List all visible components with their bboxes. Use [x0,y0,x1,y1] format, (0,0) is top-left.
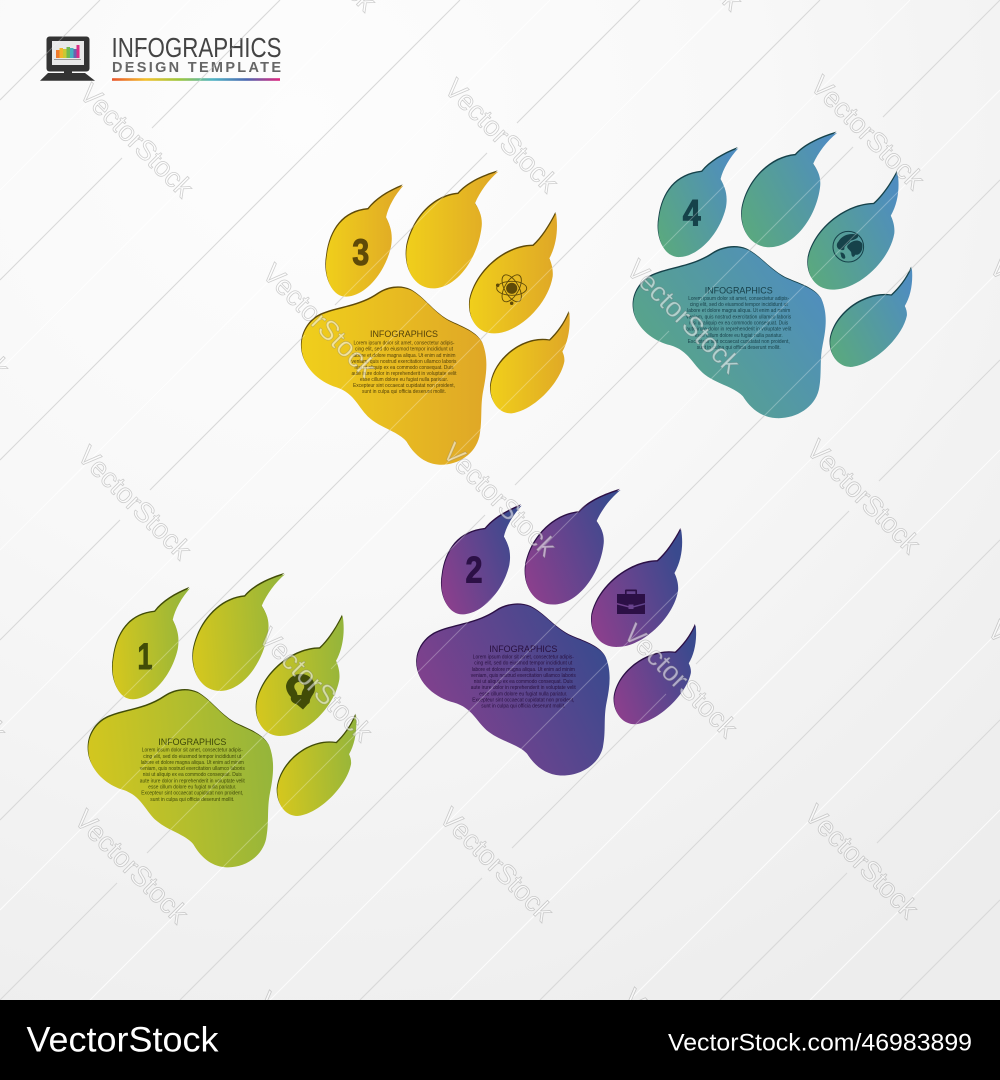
text block yellow: Excepteur sint occaecat cupidatat non proident, [353,383,455,389]
text block teal [686,285,792,351]
text block yellow: Lorem ipsum dolor sit amet, consectetur adipis- [354,341,455,347]
logo header [40,32,282,81]
watermark pattern: VectorStock [257,258,383,383]
text block yellow: veniam, quis nostrud exercitation ullamco laboris [352,359,457,365]
watermark pattern: VectorStock [434,802,560,927]
text block teal: Lorem ipsum dolor sit amet, consectetur adipis- [688,296,789,302]
text block purple: INFOGRAPHICS [489,644,557,655]
watermark pattern: VectorStock [69,804,195,929]
watermark pattern: VectorStock [72,440,198,565]
panel: paw 1 green [88,573,356,867]
watermark pattern: VectorStock [437,437,563,562]
icon: computer monitor with bar chart [40,36,95,81]
text block green: INFOGRAPHICS [158,737,226,748]
heading: infographics: INFOGRAPHICS [112,32,282,63]
watermark pattern: VectorStock [621,254,747,379]
icon: head with light bulb [286,674,315,710]
text block teal: sunt in culpa qui officia deserunt mollit. [697,345,781,351]
text block green: esse cillum dolore eu fugiat nulla pariatur. [148,785,236,791]
panel: paw 3 yellow [301,170,570,465]
text block teal: esse cillum dolore eu fugiat nulla pariatur. [695,333,783,339]
text block teal: veniam, quis nostrud exercitation ullamco laboris [686,314,792,320]
text block green: nisi ut aliquip ex ea commodo consequat. Duis [143,772,242,778]
text block yellow: INFOGRAPHICS [370,329,438,340]
text block green: Excepteur sint occaecat cupidatat non proident, [141,791,243,797]
icon: globe [833,231,864,262]
text block green: aute irure dolor in reprehenderit in voluptate velit [140,778,245,784]
text block purple: aute irure dolor in reprehenderit in voluptate velit [471,685,576,691]
text block teal: cing elit, sed do eiusmod tempor incididunt ut [690,302,788,308]
icon: atom [496,272,527,305]
text block yellow [352,329,457,395]
footer logo text: VectorStock [26,1021,219,1060]
text block green: veniam, quis nostrud exercitation ullamco laboris [140,766,245,772]
panel: paw 2 purple [415,487,697,778]
text block teal: labore et dolore magna aliqua. Ut enim ad minim [687,308,790,314]
text block purple: esse cillum dolore eu fugiat nulla pariatur. [479,691,567,697]
footer band [0,1000,1000,1080]
subheading: design template: DESIGN TEMPLATE [112,60,281,76]
watermark pattern: VectorStock [439,73,565,198]
text block yellow: sunt in culpa qui officia deserunt mollit. [362,389,446,395]
text block green: sunt in culpa qui officia deserunt mollit. [150,797,234,803]
text block purple: Excepteur sint occaecat cupidatat non proident, [472,698,574,704]
text block teal: Excepteur sint occaecat cupidatat non proident, [688,339,790,345]
paw shape green [88,573,356,867]
watermark pattern: VectorStock [801,434,927,559]
text block purple: veniam, quis nostrud exercitation ullamco laboris [471,673,576,679]
watermark pattern: VectorStock [253,622,379,747]
number 4: 4 [683,192,701,234]
text block yellow: aute irure dolor in reprehenderit in voluptate velit [352,371,457,377]
text block yellow: esse cillum dolore eu fugiat nulla pariatur. [360,377,448,383]
text block green: cing elit, sed do eiusmod tempor incididunt ut [143,754,242,760]
rainbow rule [112,78,280,81]
text block yellow: labore et dolore magna aliqua. Ut enim ad minim [352,353,456,359]
paw shape teal [632,130,913,421]
text block purple: nisi ut aliquip ex ea commodo consequat. Duis [474,679,573,685]
text block purple [471,644,576,710]
text block yellow: nisi ut aliquip ex ea commodo consequat. Duis [354,365,454,371]
watermark pattern: VectorStock [805,70,931,195]
watermark pattern: VectorStock [618,618,744,743]
text block teal: aute irure dolor in reprehenderit in voluptate velit [686,327,792,333]
number 1: 1 [138,636,152,677]
text block yellow: cing elit, sed do eiusmod tempor incididunt ut [355,347,454,353]
text block green: Lorem ipsum dolor sit amet, consectetur adipis- [142,748,243,754]
icon: briefcase [617,590,645,614]
panel: paw 4 teal [632,130,913,421]
text block purple: cing elit, sed do eiusmod tempor incididunt ut [474,661,573,667]
number 3: 3 [352,232,369,273]
paw shape yellow [301,170,570,465]
text block purple: labore et dolore magna aliqua. Ut enim ad minim [472,667,575,673]
text block purple: sunt in culpa qui officia deserunt mollit. [481,704,565,710]
paw shape purple [415,487,697,778]
watermark pattern: VectorStock [799,799,925,924]
text block green [140,737,245,803]
footer url: VectorStock.com/46983899 [668,1030,972,1056]
text block purple: Lorem ipsum dolor sit amet, consectetur adipis- [473,655,574,661]
text block teal: INFOGRAPHICS [705,285,773,296]
text block green: labore et dolore magna aliqua. Ut enim ad minim [141,760,244,766]
watermark pattern: VectorStock [74,78,200,203]
text block teal: nisi ut aliquip ex ea commodo consequat. Duis [689,320,789,326]
number 2: 2 [466,550,482,590]
